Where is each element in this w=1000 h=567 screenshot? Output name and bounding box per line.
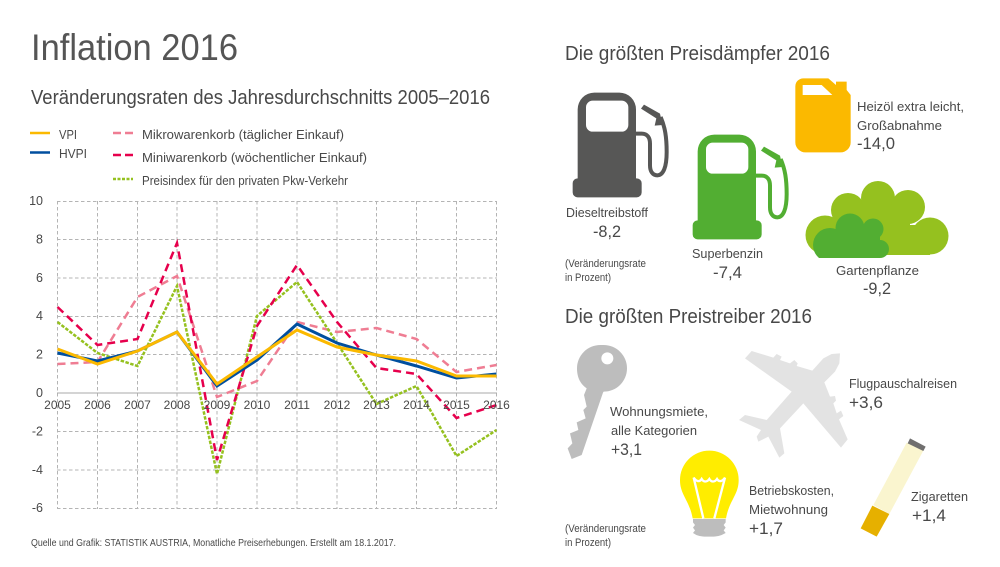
label: Betriebskosten: +1,7 — [749, 519, 783, 538]
label: Wohnungsmiete: alle Kategorien — [611, 423, 697, 438]
label: Zigaretten: Zigaretten — [911, 489, 968, 504]
icon: cigarette — [861, 438, 926, 537]
x axis labels: 2010 — [244, 398, 271, 412]
y axis labels: 4 — [36, 309, 43, 323]
heading: Preisdämpfer: Die größten Preisdämpfer 2016 — [565, 43, 830, 65]
x axis labels: 2008 — [164, 398, 191, 412]
chart legend — [30, 127, 367, 188]
x axis labels: 2012 — [324, 398, 351, 412]
series: Mikrowarenkorb — [58, 276, 496, 397]
label: Gartenpflanze — [836, 263, 919, 298]
label: Wohnungsmiete: Wohnungsmiete, — [610, 404, 708, 419]
icon: light bulb — [680, 451, 739, 537]
y axis labels: 0 — [36, 386, 43, 400]
icon: grey fuel pump — [573, 93, 667, 197]
label: Superbenzin — [692, 246, 763, 282]
label: Wohnungsmiete — [610, 404, 708, 459]
icon: key — [568, 345, 627, 459]
legend: HVPI — [30, 146, 87, 161]
y axis labels: 2 — [36, 348, 43, 362]
subtitle: Veränderungsraten des Jahresdurchschnitts 2005–2016 — [31, 87, 490, 109]
title: Inflation 2016 — [31, 27, 238, 68]
note: Veränderungsrate: (Veränderungsrate — [565, 258, 646, 270]
label: Betriebskosten: Betriebskosten, — [749, 483, 834, 498]
label: Heizöl: Großabnahme — [857, 118, 942, 133]
label: Betriebskosten — [749, 483, 834, 538]
series: VPI — [58, 330, 496, 384]
series: HVPI — [58, 324, 496, 386]
x axis labels: 2014 — [403, 398, 430, 412]
heading: Preistreiber: Die größten Preistreiber 2016 — [565, 306, 812, 328]
label: Heizöl: -14,0 — [857, 134, 895, 153]
label: Gartenpflanze: -9,2 — [863, 279, 891, 298]
icon: bush — [806, 181, 948, 262]
label: Wohnungsmiete: +3,1 — [611, 440, 642, 459]
icon: airplane — [739, 351, 848, 458]
series: Preisindex Pkw-Verkehr — [58, 282, 496, 474]
label: Zigaretten — [911, 489, 968, 525]
legend: HVPI: HVPI — [59, 146, 87, 161]
label: Betriebskosten: Mietwohnung — [749, 502, 828, 517]
y axis labels: -2 — [32, 424, 43, 438]
source note: Quelle und Grafik: STATISTIK AUSTRIA, Monatliche Preiserhebungen. Erstellt am 18.1.2017. — [31, 538, 396, 549]
label: Flugpauschalreisen: Flugpauschalreisen — [849, 376, 957, 391]
note: Veränderungsrate (Preistreiber) — [565, 523, 646, 549]
icon: green fuel pump — [693, 135, 787, 239]
label: Dieseltreibstoff: Dieseltreibstoff — [566, 205, 648, 220]
label: Heizöl: Heizöl extra leicht, — [857, 99, 964, 114]
legend: Miniwarenkorb: Miniwarenkorb (wöchentlicher Einkauf) — [142, 151, 367, 165]
legend: Mikrowarenkorb: Mikrowarenkorb (täglicher Einkauf) — [142, 128, 344, 142]
x axis labels: 2005 — [44, 398, 71, 412]
y axis labels: 10 — [29, 194, 43, 208]
label: Dieseltreibstoff — [566, 205, 648, 241]
x axis labels: 2007 — [124, 398, 151, 412]
y axis labels: -6 — [32, 501, 43, 515]
label: Zigaretten: +1,4 — [912, 506, 946, 525]
x axis labels — [44, 398, 510, 412]
y axis labels — [29, 194, 43, 515]
note: Veränderungsrate: in Prozent) — [565, 272, 611, 284]
x axis labels: 2015 — [443, 398, 470, 412]
label: Flugpauschalreisen — [849, 376, 957, 412]
y axis labels: 6 — [36, 271, 43, 285]
line chart — [29, 194, 510, 515]
note: Veränderungsrate (Preistreiber): in Prozent) — [565, 537, 611, 549]
note: Veränderungsrate — [565, 258, 646, 284]
x axis labels: 2016 — [483, 398, 510, 412]
label: Flugpauschalreisen: +3,6 — [849, 393, 883, 412]
x axis labels: 2011 — [284, 398, 310, 412]
series: Miniwarenkorb — [58, 243, 496, 460]
label: Heizöl — [857, 99, 964, 153]
note: Veränderungsrate (Preistreiber): (Veränderungsrate — [565, 523, 646, 535]
x axis labels: 2009 — [204, 398, 231, 412]
label: Dieseltreibstoff: -8,2 — [593, 222, 621, 241]
x axis labels: 2013 — [363, 398, 390, 412]
label: Superbenzin: -7,4 — [713, 263, 742, 282]
legend: VPI: VPI — [59, 127, 77, 142]
legend: VPI — [30, 127, 77, 142]
icon: jerry can — [795, 78, 851, 152]
legend: Preisindex Pkw-Verkehr: Preisindex für den privaten Pkw-Verkehr — [142, 174, 348, 188]
y axis labels: 8 — [36, 232, 43, 246]
y axis labels: -4 — [32, 463, 43, 477]
x axis labels: 2006 — [84, 398, 111, 412]
label: Gartenpflanze: Gartenpflanze — [836, 263, 919, 278]
label: Superbenzin: Superbenzin — [692, 246, 763, 261]
